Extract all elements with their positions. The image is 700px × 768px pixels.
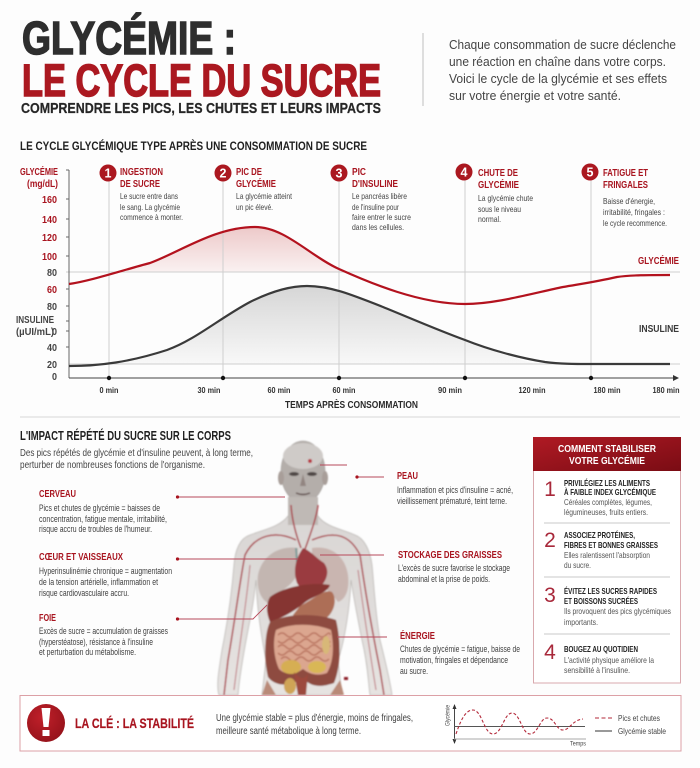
step 4: La glycémie chute bbox=[478, 194, 533, 203]
tip 1: Céréales complètes, légumes, bbox=[564, 497, 652, 507]
time axis bbox=[69, 375, 680, 411]
key heading: LA CLÉ : LA STABILITÉ bbox=[75, 715, 194, 731]
callout: energie bbox=[400, 629, 520, 676]
callout: energie: motivation, fringales et dépendance bbox=[400, 655, 508, 665]
callout leader lines bbox=[176, 465, 387, 637]
callout: foie: FOIE bbox=[39, 612, 56, 624]
y axis labels: (mg/dL) bbox=[27, 178, 58, 190]
step 1: le sang. La glycémie bbox=[120, 203, 180, 212]
step 4: sous le niveau bbox=[478, 205, 521, 214]
callout: energie: Chutes de glycémie = fatigue, baisse de bbox=[400, 644, 520, 654]
area under insulin curve bbox=[112, 286, 535, 364]
lower abdomen bbox=[294, 672, 308, 695]
callout: coeur et vaisseaux: risque cardiovasculaire accru. bbox=[39, 588, 129, 598]
time axis: 0 min bbox=[100, 385, 118, 395]
callout: energie: au sucre. bbox=[400, 666, 428, 676]
callout: foie: et perturbation du métabolisme. bbox=[39, 647, 136, 657]
tip 1: À FAIBLE INDEX GLYCÉMIQUE bbox=[564, 487, 656, 497]
legend bbox=[595, 713, 666, 736]
callout: foie: (hyperstéatose), résistance à l'insuline bbox=[39, 637, 153, 647]
step 1: INGESTION bbox=[120, 167, 163, 178]
step 5: FRINGALES bbox=[603, 180, 648, 191]
panel header: COMMENT STABILISER bbox=[558, 443, 656, 455]
step 3: dans les cellules. bbox=[352, 223, 404, 232]
y axis labels: 80 bbox=[47, 301, 57, 313]
time axis: 180 min bbox=[652, 385, 680, 395]
panel header: VOTRE GLYCÉMIE bbox=[569, 454, 645, 467]
tip 4 bbox=[544, 641, 654, 675]
tip 3: Ils provoquent des pics glycémiques bbox=[564, 606, 671, 616]
head bbox=[281, 441, 325, 503]
tip 2: ASSOCIEZ PROTÉINES, bbox=[564, 530, 635, 540]
y axis labels bbox=[16, 165, 58, 383]
icon: exclamation mark bbox=[27, 704, 65, 742]
subtitle: COMPRENDRE LES PICS, LES CHUTES ET LEURS IMPACTS bbox=[21, 101, 381, 117]
legend: Glycémie stable bbox=[618, 726, 666, 736]
step 5: Baisse d'énergie, bbox=[603, 197, 655, 206]
callout: energie: ÉNERGIE bbox=[400, 629, 435, 642]
mini chart: glycemia stability bbox=[446, 704, 587, 748]
callout: coeur et vaisseaux bbox=[39, 551, 172, 598]
step 1: DE SUCRE bbox=[120, 179, 160, 190]
step 4: 4 bbox=[461, 166, 468, 180]
step 4: CHUTE DE bbox=[478, 168, 518, 179]
intro text: sur votre énergie et votre santé. bbox=[449, 89, 621, 103]
insulin curve bbox=[69, 286, 670, 366]
callout: peau bbox=[397, 470, 513, 506]
section heading: impact bbox=[20, 428, 253, 471]
step 3 bbox=[330, 164, 411, 232]
y axis labels: 120 bbox=[42, 232, 57, 244]
step 3: faire entrer le sucre bbox=[352, 213, 411, 222]
y axis labels: 100 bbox=[42, 251, 57, 263]
key text: Une glycémie stable = plus d'énergie, moins de fringales, bbox=[216, 713, 413, 724]
tip 1 bbox=[544, 478, 656, 517]
tip 1: PRIVILÉGIEZ LES ALIMENTS bbox=[564, 478, 650, 488]
heart bbox=[295, 548, 327, 593]
y axis labels: GLYCÉMIE bbox=[20, 165, 58, 178]
step 1: Le sucre entre dans bbox=[120, 192, 178, 201]
step 4 bbox=[456, 164, 533, 224]
panel header bbox=[533, 437, 681, 471]
callout: cerveau: CERVEAU bbox=[39, 488, 76, 500]
step 2: un pic élevé. bbox=[236, 203, 273, 212]
step 2: GLYCÉMIE bbox=[236, 177, 276, 190]
curve labels: GLYCÉMIE bbox=[638, 254, 679, 267]
step 1 bbox=[100, 164, 183, 222]
callout: coeur et vaisseaux: de la tension artérielle, inflammation et bbox=[39, 577, 158, 587]
y axis bbox=[66, 170, 69, 378]
y axis labels: 160 bbox=[42, 194, 57, 206]
callout: stockage des graisses: L'excès de sucre favorise le stockage bbox=[398, 563, 510, 573]
callout: cerveau bbox=[39, 488, 167, 534]
key text: meilleure santé métabolique à long terme. bbox=[216, 726, 361, 737]
tip 2: du sucre. bbox=[564, 560, 591, 570]
callout: stockage des graisses bbox=[398, 549, 510, 584]
tip 4: BOUGEZ AU QUOTIDIEN bbox=[564, 645, 638, 654]
callout: stockage des graisses: abdominal et la prise de poids. bbox=[398, 574, 490, 584]
anatomical body illustration bbox=[218, 441, 392, 695]
glycemia curve bbox=[69, 227, 670, 304]
liver bbox=[267, 584, 330, 622]
impact intro: Des pics répétés de glycémie et d'insuline peuvent, à long terme, bbox=[20, 448, 253, 459]
tip 1: légumineuses, fruits entiers. bbox=[564, 507, 648, 517]
step 2: 2 bbox=[220, 166, 227, 180]
tip 2: 2 bbox=[544, 529, 556, 552]
tip 2: FIBRES ET BONNES GRAISSES bbox=[564, 541, 658, 550]
intro text: Voici le cycle de la glycémie et ses effets bbox=[449, 72, 667, 86]
intro text: une réaction en chaîne dans votre corps. bbox=[449, 55, 666, 69]
y axis labels: 140 bbox=[42, 214, 57, 226]
step 4: GLYCÉMIE bbox=[478, 178, 519, 191]
step 5: 5 bbox=[587, 166, 594, 180]
step 3: PIC bbox=[352, 167, 366, 178]
curve labels: INSULINE bbox=[639, 323, 679, 335]
title line 1: GLYCÉMIE : bbox=[22, 12, 236, 64]
time axis: 30 min bbox=[198, 385, 220, 395]
tip 2: Elles ralentissent l'absorption bbox=[564, 550, 650, 560]
time axis: TEMPS APRÈS CONSOMMATION bbox=[285, 398, 418, 411]
mini chart: glycemia stability: Glycémie bbox=[446, 704, 452, 726]
section heading: cycle: LE CYCLE GLYCÉMIQUE TYPE APRÈS UNE CONSOMMATION DE SUCRE bbox=[20, 138, 367, 153]
callout: stockage des graisses: STOCKAGE DES GRAISSES bbox=[398, 549, 502, 561]
step 2: La glycémie atteint bbox=[236, 192, 293, 201]
stomach bbox=[293, 591, 335, 623]
time axis: 90 min bbox=[438, 385, 462, 395]
step 4: normal. bbox=[478, 215, 501, 224]
small intestine bbox=[274, 625, 333, 675]
tip 3: importants. bbox=[564, 617, 598, 627]
section heading: impact: L'IMPACT RÉPÉTÉ DU SUCRE SUR LE CORPS bbox=[20, 428, 231, 443]
step 5 bbox=[582, 164, 667, 228]
title block bbox=[21, 12, 381, 117]
silhouette bbox=[218, 516, 392, 695]
y axis labels: 0 bbox=[52, 371, 57, 383]
callout: cerveau: risque accru de troubles de l'humeur. bbox=[39, 524, 152, 534]
panel: comment stabiliser votre glycémie bbox=[533, 437, 681, 683]
y axis labels: 20 bbox=[47, 359, 57, 371]
time axis: 60 min bbox=[332, 385, 356, 395]
callout: peau: PEAU bbox=[397, 470, 418, 482]
callout: coeur et vaisseaux: Hyperinsulinémie chronique = augmentation bbox=[39, 566, 172, 576]
impact intro: perturber de nombreuses fonctions de l'organisme. bbox=[20, 460, 205, 471]
intro text bbox=[449, 38, 676, 103]
callout: peau: Inflammation et pics d'insuline = acné, bbox=[397, 485, 513, 495]
step 3: Le pancréas libère bbox=[352, 192, 407, 201]
curve labels bbox=[638, 254, 679, 335]
y axis labels: 0 bbox=[52, 326, 57, 338]
chart: glycemia and insulin cycle bbox=[16, 164, 680, 411]
callout: foie bbox=[39, 612, 168, 657]
step 3: 3 bbox=[336, 166, 343, 180]
key text bbox=[216, 713, 413, 737]
step 3: D'INSULINE bbox=[352, 179, 398, 190]
mini chart: glycemia stability: Temps bbox=[570, 740, 587, 748]
time axis: 180 min bbox=[594, 385, 620, 395]
callout: cerveau: Pics et chutes de glycémie = baisses de bbox=[39, 503, 160, 513]
lungs bbox=[258, 547, 298, 603]
step 3: de l'insuline pour bbox=[352, 203, 399, 212]
time axis: 120 min bbox=[518, 385, 546, 395]
tip 4: sensibilité à l'insuline. bbox=[564, 665, 630, 675]
y axis labels: INSULINE bbox=[16, 315, 54, 326]
tip 4: L'activité physique améliore la bbox=[564, 655, 654, 665]
intro text: Chaque consommation de sucre déclenche bbox=[449, 38, 676, 52]
blood vessels bbox=[224, 505, 384, 695]
impact intro bbox=[20, 448, 253, 471]
y axis labels: (µUI/mL) bbox=[16, 327, 54, 338]
tip 3: ÉVITEZ LES SUCRES RAPIDES bbox=[564, 586, 657, 596]
callout: peau: vieillissement prématuré, teint terne. bbox=[397, 496, 507, 506]
step 5: irritabilité, fringales : bbox=[603, 208, 665, 217]
callout: foie: Excès de sucre = accumulation de graisses bbox=[39, 626, 168, 636]
callout: coeur et vaisseaux: CŒUR ET VAISSEAUX bbox=[39, 551, 123, 563]
y axis labels: 60 bbox=[47, 284, 57, 296]
tip 4: 4 bbox=[544, 641, 556, 664]
callout: cerveau: concentration, fatigue mentale, irritabilité, bbox=[39, 514, 167, 524]
tip 2 bbox=[544, 529, 658, 570]
tip 3: ET BOISSONS SUCRÉES bbox=[564, 596, 638, 606]
y axis labels: 80 bbox=[47, 267, 57, 279]
step 1: 1 bbox=[105, 166, 112, 180]
legend: Pics et chutes bbox=[618, 713, 660, 723]
step 1: commence à monter. bbox=[120, 213, 183, 222]
step 2: PIC DE bbox=[236, 167, 262, 178]
step 2 bbox=[214, 164, 293, 212]
tip 3 bbox=[544, 584, 671, 627]
tip 3: 3 bbox=[544, 584, 556, 607]
step 5: FATIGUE ET bbox=[603, 168, 648, 179]
area under glycemia curve bbox=[118, 227, 345, 272]
step 5: le cycle recommence. bbox=[603, 219, 667, 228]
y axis labels: 40 bbox=[47, 342, 57, 354]
tip 1: 1 bbox=[544, 478, 556, 501]
title line 2: LE CYCLE DU SUCRE bbox=[22, 55, 381, 106]
panel: la clé, la stabilité bbox=[20, 696, 681, 751]
colon bbox=[265, 615, 340, 686]
time axis: 60 min bbox=[268, 385, 290, 395]
